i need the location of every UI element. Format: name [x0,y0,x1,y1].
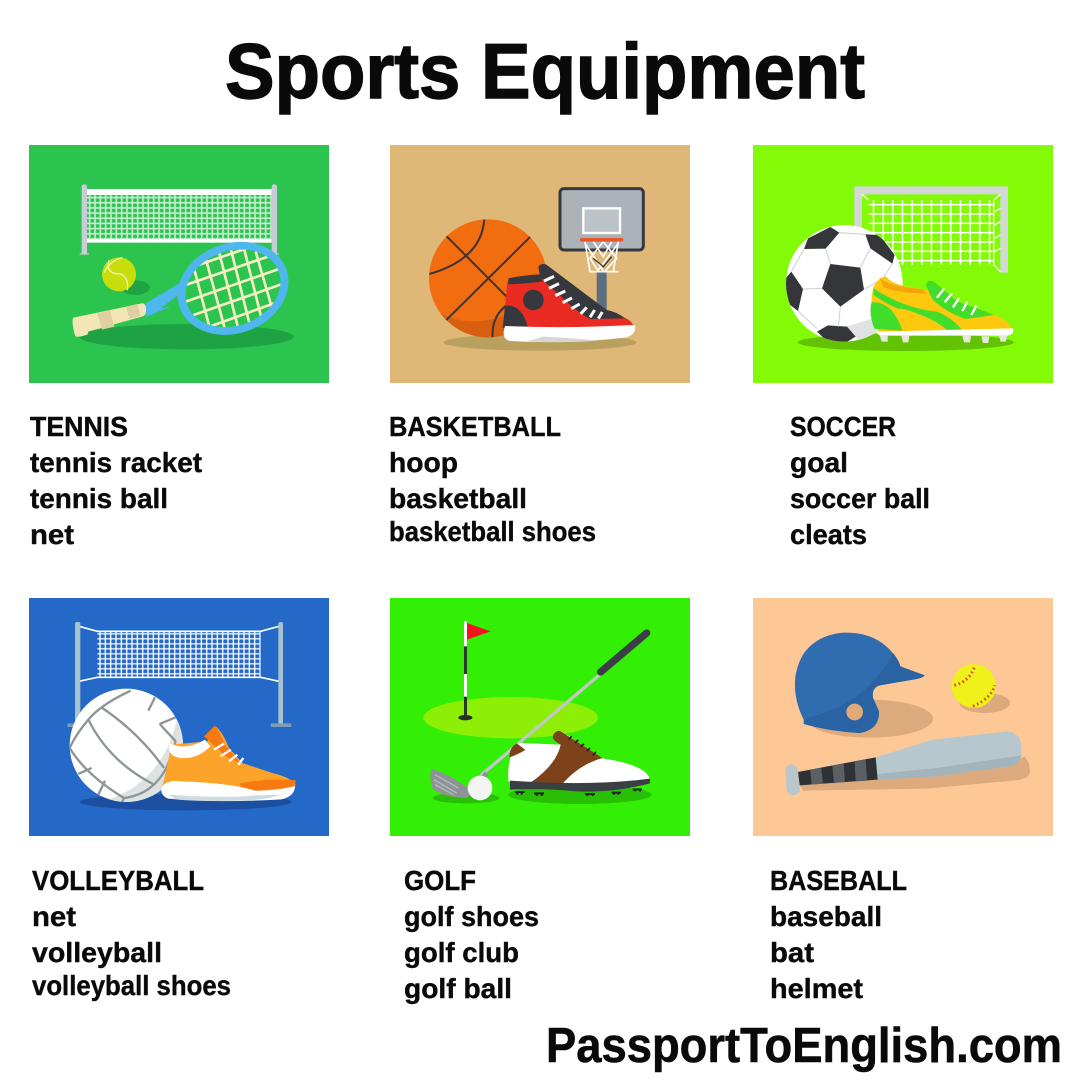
icon: soccer cleat [871,277,1013,343]
text block: volleyball: VOLLEYBALL [32,865,204,896]
text block: volleyball: volleyball [32,937,162,968]
panel: baseball [753,598,1053,836]
panel: soccer [753,145,1053,383]
icon: golf green [423,697,598,738]
icon: golf shoe [508,731,650,796]
text block: basketball: hoop [389,447,458,478]
title: Sports Equipment [225,27,865,115]
text block: golf: golf club [404,937,519,968]
text block: soccer: soccer ball [790,483,930,514]
shadow: helmet [806,700,933,738]
icon: soccer ball [786,225,903,342]
icon: helmet [795,633,925,733]
text block: soccer: SOCCER [790,411,896,442]
icon: volleyball shoe [161,726,296,801]
icon: volleyball [70,689,189,805]
text block: basketball: basketball [389,483,527,514]
text block: tennis: tennis racket [30,447,202,478]
text block: volleyball [32,865,231,1001]
text block: golf: golf ball [404,973,512,1004]
icon: basketball [429,219,547,342]
text block: baseball: baseball [770,901,882,932]
icon: hoop [560,189,643,316]
text block: basketball: BASKETBALL [389,411,561,442]
icon: golf flag [458,621,491,720]
icon: golf club [430,633,647,798]
text block: baseball: BASEBALL [770,865,907,896]
icon: goal [854,186,1008,273]
shadow [80,794,292,810]
text block: golf: golf shoes [404,901,539,932]
text block: tennis: TENNIS [30,411,128,442]
text block: soccer: cleats [790,519,867,550]
text block: tennis: tennis ball [30,483,168,514]
shadow [443,334,637,351]
text block: baseball: bat [770,937,814,968]
panel: golf [390,598,690,836]
icon: bat [785,731,1030,795]
icon: basketball shoe [503,264,635,342]
icon: volleyball net [67,622,291,727]
text block: volleyball: volleyball shoes [32,970,231,1001]
text block: golf: GOLF [404,865,476,896]
text block: golf [404,865,539,1004]
text block: soccer [790,411,930,550]
icon: tennis racket [72,242,294,350]
text block: tennis: net [30,519,74,550]
text block: volleyball: net [32,901,76,932]
icon: golf ball [468,776,492,800]
text block: basketball: basketball shoes [389,516,596,547]
icon: tennis ball [102,257,150,295]
text block: soccer: goal [790,447,848,478]
text block: baseball: helmet [770,973,863,1004]
shadows [433,793,499,803]
icon: tennis net [80,184,279,255]
text block: tennis [30,411,202,550]
text block: basketball [389,411,596,547]
panel: tennis [29,145,329,383]
panel: basketball [390,145,690,383]
panel: volleyball [29,598,329,836]
shadow [798,334,1014,351]
icon: baseball [952,664,1010,713]
text block: baseball [770,865,907,1004]
